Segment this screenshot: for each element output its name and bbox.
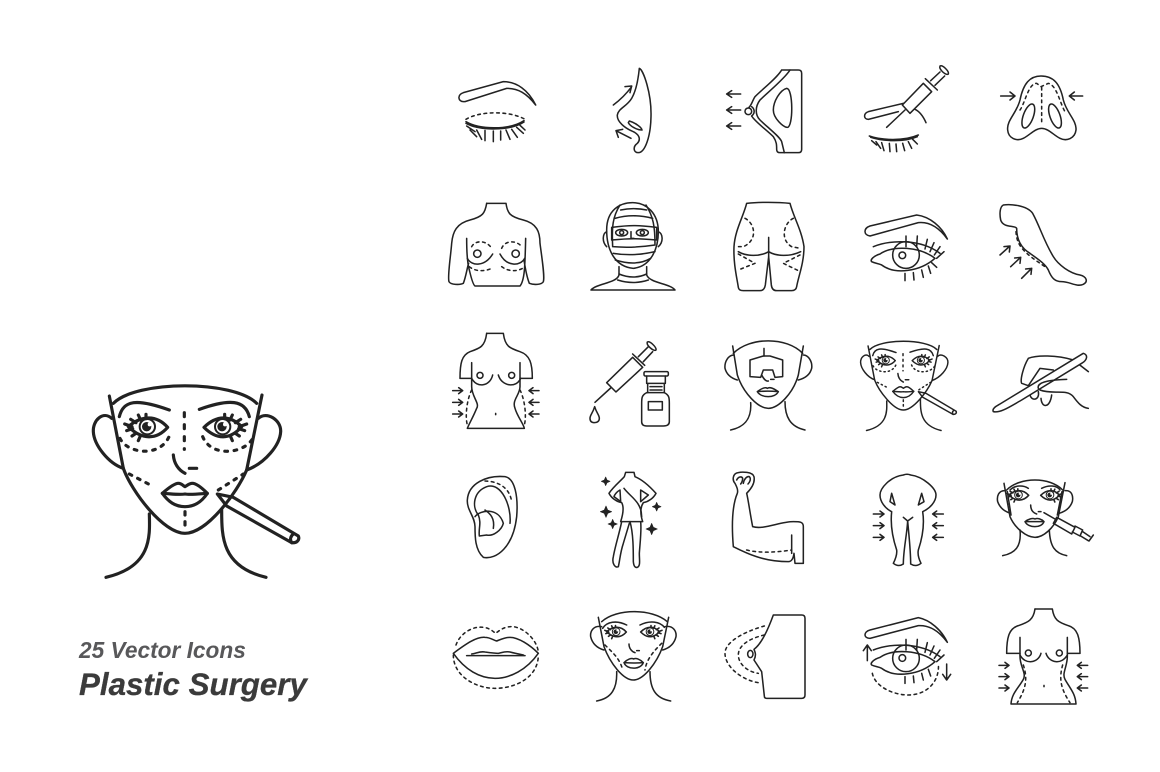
icon: body in dress with sparkles [600,472,661,567]
icon: female chest with markings [449,203,544,286]
icon: lips with dashed outline [453,627,538,688]
icon: leg with arrows [1000,205,1086,285]
icon grid: rows 3 and 4, left columns [453,333,812,567]
icon: breast side with dashed contours [725,615,805,698]
icon: breast implant side view with arrows [727,70,802,153]
icon: syringe injecting eyelid [865,66,948,152]
icon: face with cheek injection [997,480,1093,556]
icon: body figure with arrows [873,474,943,566]
subtitle: 25 Vector Icons [78,637,246,663]
icon: hand holding scalpel [993,353,1088,412]
icon: nose front view with arrows [1001,76,1083,140]
icon grid: row 5, right columns [863,609,1088,704]
icon grid: rows 1 and 2, right columns [865,66,1086,285]
icon grid: rows 3 and 4, right columns [861,341,1093,566]
icon: flexed arm [732,472,803,563]
icon: buttocks lift [734,202,804,291]
icon: bandaged head [591,203,675,290]
icon: female torso with waist arrows [453,333,539,428]
title block [78,637,308,702]
icon: open eye with eyebrow [865,215,947,281]
icon: eye lift with up and down arrows [863,618,951,695]
icon: nose profile with arrows [613,68,651,153]
icon: syringe and vial [590,342,669,426]
icon: face with nose mask [725,341,812,430]
icon grid: row 5, left columns [453,612,805,701]
icon: closed eye with eyebrow [459,82,536,142]
icon grid: rows 1 and 2, left columns [449,68,804,291]
icon: main face with surgical markings [93,386,299,577]
title: Plastic Surgery [79,667,308,702]
icon: face with jaw markings [591,612,676,701]
icon: female torso with dashed waist and arrows [999,609,1088,704]
icon: small face with surgical markings [861,341,956,431]
icon: ear [467,476,517,558]
